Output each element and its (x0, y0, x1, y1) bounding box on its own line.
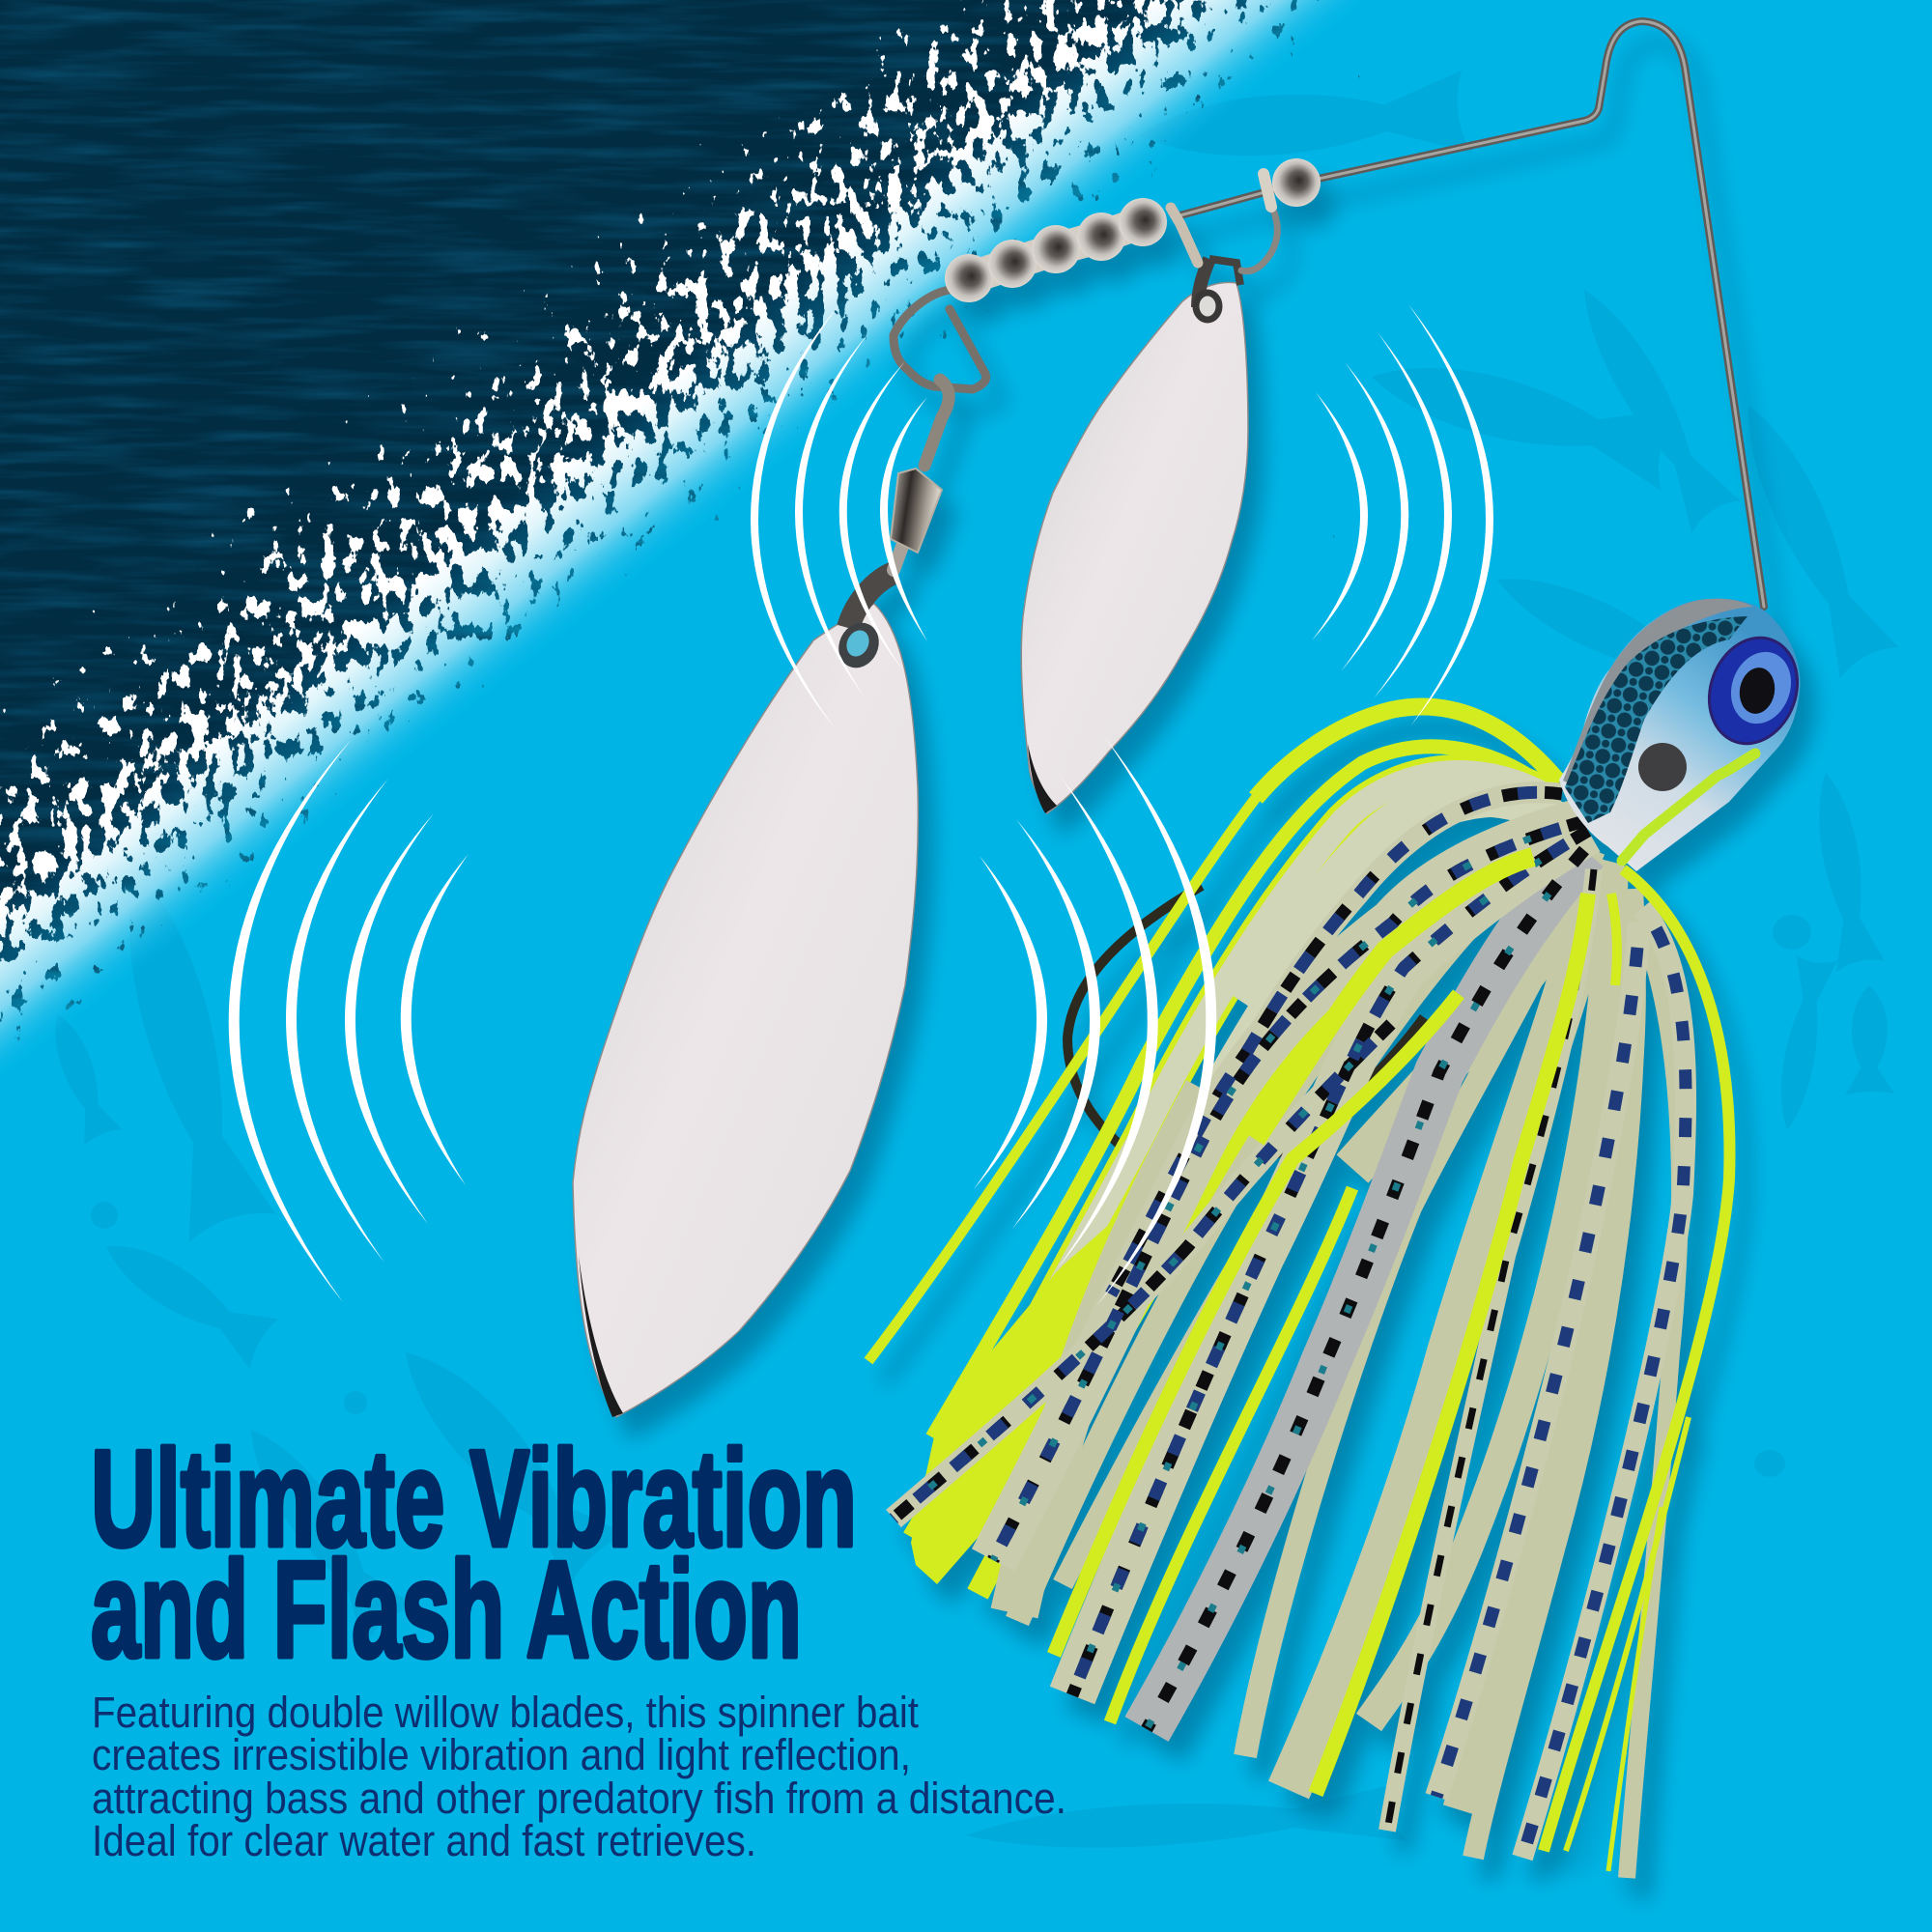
hook (1067, 886, 1424, 1176)
blue grey pearl band (1147, 850, 1584, 1729)
description text: creates irresistible vibration and light reflection, (92, 1730, 911, 1779)
chartreuse clump (911, 1198, 1140, 1584)
blade ring knot (848, 572, 896, 628)
speckled strands (894, 792, 1686, 1858)
large willow blade (573, 572, 918, 1417)
scale pattern (1565, 616, 1747, 823)
description text (92, 1688, 1066, 1865)
chartreuse belly line (1622, 753, 1755, 861)
beige arching strands (966, 773, 1565, 1507)
grey top rim (1563, 599, 1753, 787)
skirt strands (868, 707, 1729, 1878)
description text: Ideal for clear water and fast retrieves. (92, 1816, 756, 1865)
title: Ultimate Vibration (91, 1422, 857, 1576)
vibration arcs: upper right (1312, 304, 1493, 726)
foam glow along the water edge (0, 0, 1449, 1256)
spinnerbait lure (573, 21, 1811, 1878)
chartreuse falling strands (1054, 857, 1729, 1871)
description text: attracting bass and other predatory fish from a distance. (92, 1774, 1066, 1823)
clevis and swivel (891, 174, 1277, 570)
title: and Flash Action (91, 1533, 802, 1687)
title (91, 1422, 857, 1687)
wire arm (1177, 21, 1764, 607)
gill spot (1638, 743, 1687, 791)
vibration arcs: lower right (974, 735, 1216, 1306)
eye (1695, 625, 1811, 756)
description text: Featuring double willow blades, this spinner bait (92, 1688, 919, 1737)
bead chain (945, 158, 1321, 302)
chartreuse arching strands (868, 707, 1584, 1594)
beige falling strands (1014, 840, 1680, 1878)
dark open water with grunge foam edge (0, 0, 1449, 1256)
vibration arcs: lower left (229, 739, 469, 1302)
jig head (1559, 599, 1811, 871)
small willow blade (1021, 259, 1248, 813)
vibration arcs: upper left (751, 304, 927, 729)
